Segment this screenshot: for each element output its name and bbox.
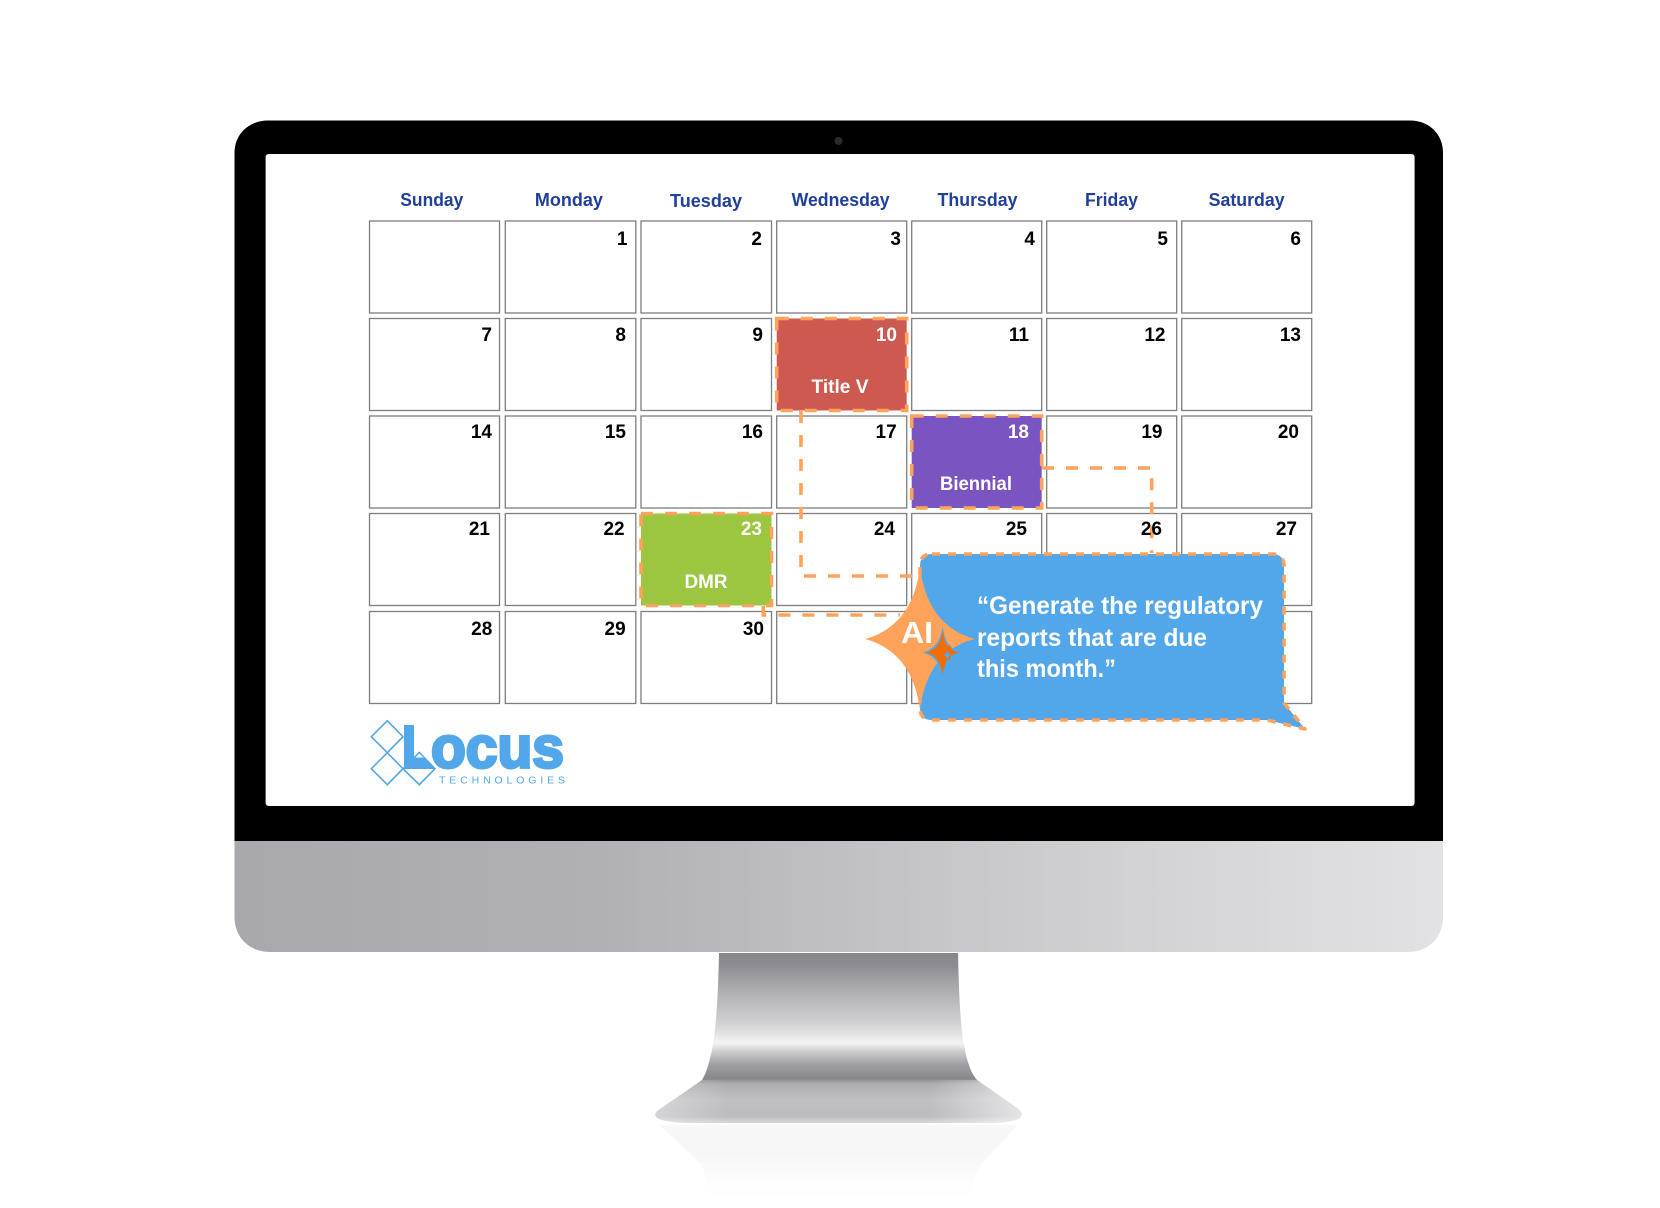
date numbers: 28	[471, 619, 492, 640]
date numbers: 16	[742, 422, 763, 443]
calendar	[370, 189, 1312, 704]
weekday headings: Thursday	[938, 189, 1018, 210]
logo tagline: TECHNOLOGIES	[439, 774, 565, 786]
highlighted event: Title V	[777, 318, 907, 410]
highlighted event: Title V: 10	[876, 325, 897, 346]
logo diamonds	[371, 721, 435, 785]
weekday headings: Sunday	[400, 189, 464, 210]
date numbers: 4	[1024, 229, 1035, 250]
date numbers: 6	[1290, 229, 1301, 250]
date numbers	[469, 229, 1301, 640]
logo: Locus Technologies	[371, 716, 565, 786]
logo L cut-out	[416, 754, 424, 758]
date numbers: 19	[1141, 422, 1162, 443]
date numbers: 12	[1144, 325, 1166, 346]
date numbers: 14	[471, 422, 492, 443]
highlighted event: DMR: 23	[741, 519, 762, 540]
prompt text	[977, 592, 1263, 683]
monitor body	[234, 120, 1443, 952]
icon: AI sparkle	[865, 567, 975, 710]
date numbers: 15	[605, 422, 626, 443]
weekday headings: Wednesday	[792, 189, 890, 210]
callout: AI prompt speech bubble	[865, 554, 1305, 729]
date numbers: 3	[890, 229, 901, 250]
date numbers: 11	[1009, 325, 1029, 346]
date numbers: 2	[751, 229, 762, 250]
weekday headings: Saturday	[1209, 189, 1285, 210]
dashed connectors from events to AI prompt	[763, 411, 1152, 615]
date numbers: 27	[1276, 519, 1297, 540]
date numbers: 5	[1157, 229, 1168, 250]
date numbers: 24	[874, 519, 895, 540]
date numbers: 21	[469, 519, 490, 540]
date numbers: 13	[1280, 325, 1301, 346]
stand neck and base	[655, 953, 1022, 1123]
weekday headings: Friday	[1085, 189, 1139, 210]
date numbers: 9	[752, 325, 763, 346]
date numbers: 1	[617, 229, 628, 250]
highlighted event: Biennial: Biennial	[940, 473, 1012, 495]
date numbers: 20	[1278, 422, 1299, 443]
weekday headings: Tuesday	[670, 190, 743, 211]
highlighted event: Biennial	[912, 416, 1042, 508]
date numbers: 25	[1006, 519, 1027, 540]
prompt text: “Generate the regulatory	[977, 592, 1263, 620]
stand reflection	[660, 1125, 1018, 1208]
stand edge highlight	[655, 1080, 1022, 1123]
prompt text: reports that are due	[977, 624, 1207, 652]
bubble shape	[920, 554, 1305, 729]
silver chin	[234, 835, 1443, 952]
date grid cells	[370, 221, 1312, 704]
date numbers: 7	[481, 325, 492, 346]
weekday headings: Monday	[535, 189, 604, 210]
icon: AI sparkle: AI	[901, 615, 933, 650]
prompt text: this month.”	[977, 655, 1116, 683]
highlighted event: Title V: Title V	[812, 376, 868, 398]
monitor stand	[655, 953, 1022, 1208]
date numbers: 17	[876, 422, 897, 443]
date numbers: 30	[743, 619, 764, 640]
black bezel	[234, 120, 1443, 841]
date numbers: 26	[1141, 519, 1162, 540]
highlighted event: DMR	[641, 514, 772, 606]
highlighted event: DMR: DMR	[684, 571, 728, 593]
logo L foot	[404, 725, 435, 769]
date numbers: 8	[615, 325, 626, 346]
webcam	[834, 137, 842, 145]
weekday headings	[400, 189, 1285, 211]
screen	[266, 154, 1415, 806]
date numbers: 29	[605, 619, 626, 640]
highlighted event: Biennial: 18	[1008, 422, 1029, 443]
logo wordmark: ocus	[431, 716, 564, 780]
date numbers: 22	[603, 519, 625, 540]
logo wordmark initial: L	[405, 760, 411, 771]
